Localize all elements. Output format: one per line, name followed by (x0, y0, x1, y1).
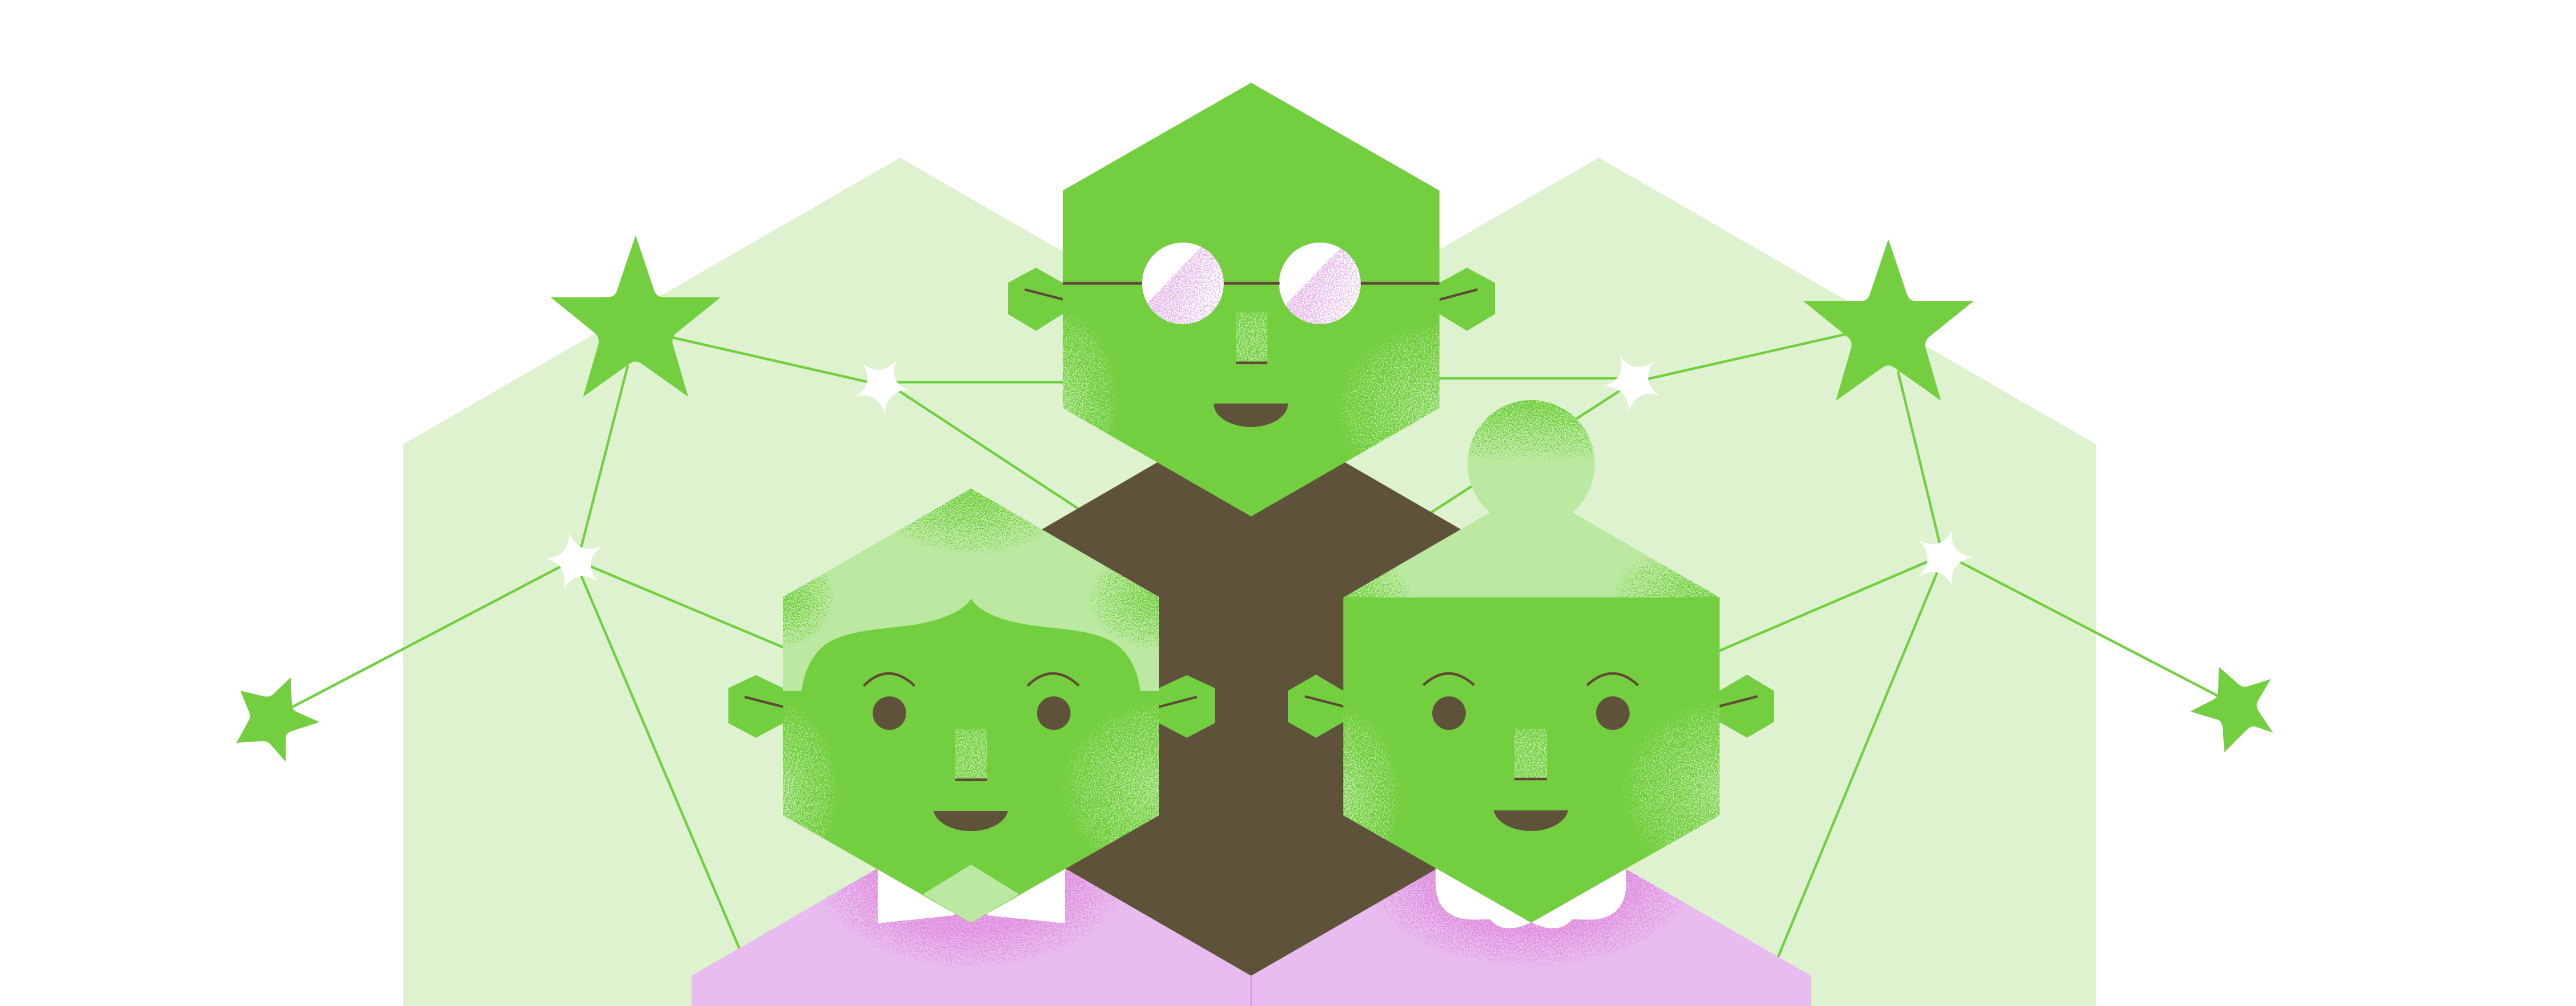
shoulders (1251, 869, 1811, 1006)
star: large green left (551, 235, 721, 397)
nose (1514, 729, 1547, 779)
figure: top person with glasses (1007, 83, 1546, 516)
mouth (1494, 810, 1568, 831)
nose (1236, 312, 1267, 363)
hair bun (1467, 400, 1595, 513)
brown torso (1042, 408, 1461, 976)
ear left (1008, 268, 1064, 331)
star: small green left (236, 677, 320, 762)
hair (1343, 513, 1720, 597)
eyebrows (864, 673, 1079, 686)
star: white middle right (1919, 530, 1973, 586)
ear left (1288, 675, 1344, 738)
mouth (1214, 404, 1288, 427)
cheek shading (727, 699, 1259, 886)
cheek shading (1343, 672, 1720, 855)
ear left (728, 675, 784, 738)
collar (1436, 861, 1626, 928)
mouth (934, 811, 1008, 831)
background hexagon right (1101, 158, 2096, 1006)
cheek shading (1007, 307, 1546, 500)
ear right (1439, 268, 1495, 331)
star: small green right (2190, 667, 2273, 752)
collar (878, 861, 1065, 923)
eyes (1432, 696, 1630, 730)
face (783, 599, 1159, 923)
face (1343, 597, 1720, 923)
star: white middle left (546, 533, 601, 589)
figure: right person with hair bun (1251, 400, 1831, 1006)
nose (955, 729, 987, 780)
bow tie centre (923, 865, 1019, 923)
constellation lines (292, 334, 2220, 958)
hair (783, 488, 1159, 923)
illustration: family constellation (236, 83, 2273, 1006)
glasses (1063, 240, 1439, 330)
star: white upper right (1603, 356, 1659, 411)
star: white upper left (855, 360, 909, 415)
shoulders (692, 869, 1251, 1006)
eyes (873, 696, 1071, 730)
figure: left person with bow tie (692, 488, 1251, 1006)
head hexagon (1063, 83, 1439, 516)
star: large green right (1803, 239, 1973, 401)
ear right (1718, 675, 1774, 738)
eyebrows (1423, 673, 1638, 685)
background hexagon left (403, 158, 1397, 1006)
ear right (1158, 675, 1215, 738)
